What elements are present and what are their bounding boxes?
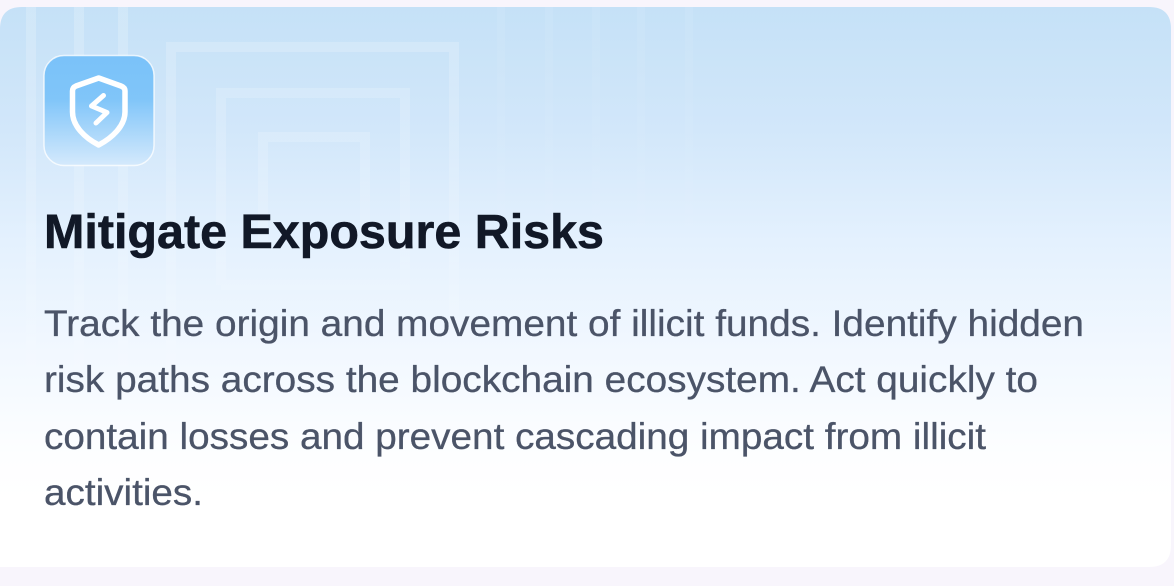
icon: shield with lightning bolt — [44, 56, 154, 166]
background pattern: circuit lines — [26, 7, 459, 89]
text block: description: activities. — [44, 472, 203, 513]
text block: description: Track the origin and movement of illicit funds. Identify hidden — [44, 303, 1084, 344]
heading: Mitigate Exposure Risks — [44, 206, 604, 259]
text block: description: contain losses and prevent cascading impact from illicit — [44, 416, 987, 457]
text block: description — [44, 303, 1084, 513]
text block: description: risk paths across the blockchain ecosystem. Act quickly to — [44, 359, 1038, 400]
